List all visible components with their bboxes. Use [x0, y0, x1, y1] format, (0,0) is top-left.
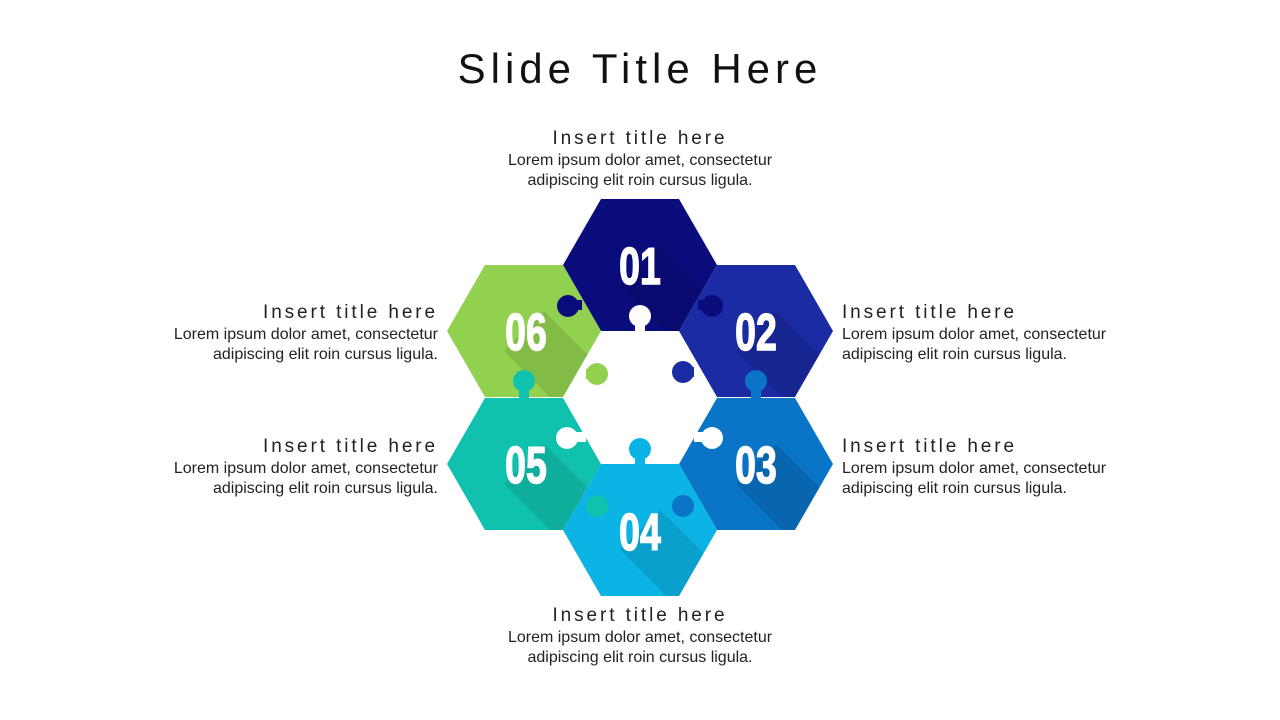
text block: 06: Insert title here — [263, 302, 438, 323]
text block: 03: Insert title here — [842, 436, 1017, 457]
text block: 03: adipiscing elit roin cursus ligula. — [842, 480, 1067, 497]
text block: 01: Lorem ipsum dolor amet, consectetur — [508, 152, 772, 169]
text block: 02: Insert title here — [842, 302, 1017, 323]
text block: 05 — [174, 436, 438, 497]
text block: 02: Lorem ipsum dolor amet, consectetur — [842, 326, 1106, 343]
hexagon 02: 02 — [735, 303, 777, 361]
text block: 05: Lorem ipsum dolor amet, consectetur — [174, 460, 438, 477]
text block: 04: adipiscing elit roin cursus ligula. — [528, 649, 752, 666]
text block: 01: adipiscing elit roin cursus ligula. — [528, 172, 752, 189]
hexagon 06 — [447, 265, 601, 397]
text block: 01 — [508, 128, 772, 189]
text block: 06 — [174, 302, 438, 363]
hexagon 02 — [679, 265, 833, 397]
text block: 03 — [842, 436, 1106, 497]
hexagon 05 — [447, 398, 601, 530]
text block: 03: Lorem ipsum dolor amet, consectetur — [842, 460, 1106, 477]
text block: 06: Lorem ipsum dolor amet, consectetur — [174, 326, 438, 343]
hexagon 03: 03 — [735, 436, 777, 494]
puzzle hexagon diagram — [447, 199, 833, 596]
text block: 04: Insert title here — [552, 605, 727, 626]
text block: 04 — [508, 605, 772, 666]
hexagon 04: 04 — [619, 503, 661, 561]
hexagon 06: 06 — [505, 303, 547, 361]
text block: 04: Lorem ipsum dolor amet, consectetur — [508, 629, 772, 646]
text block: 02 — [842, 302, 1106, 363]
text block: 02: adipiscing elit roin cursus ligula. — [842, 346, 1067, 363]
hexagon 05: 05 — [505, 436, 547, 494]
hexagon 03 — [679, 398, 833, 530]
text block: 05: adipiscing elit roin cursus ligula. — [213, 480, 438, 497]
puzzle knobs — [513, 295, 767, 517]
text block: 05: Insert title here — [263, 436, 438, 457]
hexagon 04 — [563, 464, 717, 596]
hexagon 01 — [563, 199, 717, 331]
text block: 01: Insert title here — [552, 128, 727, 149]
title: Slide Title Here — [458, 45, 822, 92]
hexagon 01: 01 — [619, 237, 661, 295]
text block: 06: adipiscing elit roin cursus ligula. — [213, 346, 438, 363]
